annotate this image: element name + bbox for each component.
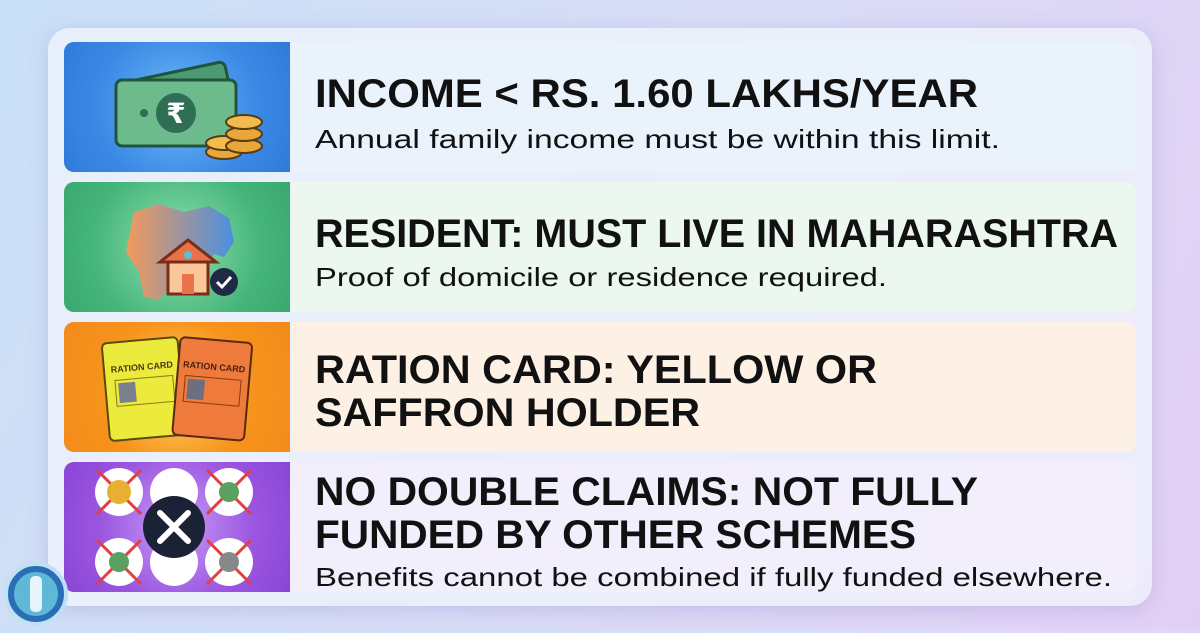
text: income — [292, 42, 1136, 172]
text: resident: Proof of domicile or residence required. — [315, 262, 887, 292]
text: resident — [292, 182, 1136, 312]
icon: money: ₹ — [166, 97, 186, 130]
text: no double claims: NO DOUBLE CLAIMS: NOT FULLY — [315, 470, 978, 514]
text: income: INCOME < RS. 1.60 LAKHS/YEAR — [315, 72, 978, 116]
row 1: income — [64, 42, 1000, 172]
text: ration card: SAFFRON HOLDER — [315, 391, 700, 435]
icon: map house — [64, 182, 290, 312]
row 3: ration card — [64, 322, 1136, 452]
logo badge — [4, 562, 68, 626]
icon: ration cards — [64, 322, 290, 452]
text: ration card — [292, 322, 1136, 452]
row 2: resident — [64, 182, 1136, 312]
text: no double claims — [292, 462, 1136, 592]
text: resident: RESIDENT: MUST LIVE IN MAHARASHTRA — [315, 212, 1118, 256]
icon: money — [64, 42, 290, 172]
text: no double claims: Benefits cannot be combined if fully funded elsewhere. — [315, 562, 1112, 592]
text: no double claims: FUNDED BY OTHER SCHEMES — [315, 513, 916, 557]
icon: crossed schemes — [64, 462, 290, 592]
text: ration card: RATION CARD: YELLOW OR — [315, 348, 877, 392]
row 4: no double claims — [64, 462, 1112, 592]
text: income: Annual family income must be within this limit. — [315, 124, 1000, 154]
icon: ration cards: RATION CARD — [183, 359, 246, 375]
icon: ration cards: RATION CARD — [110, 359, 174, 375]
